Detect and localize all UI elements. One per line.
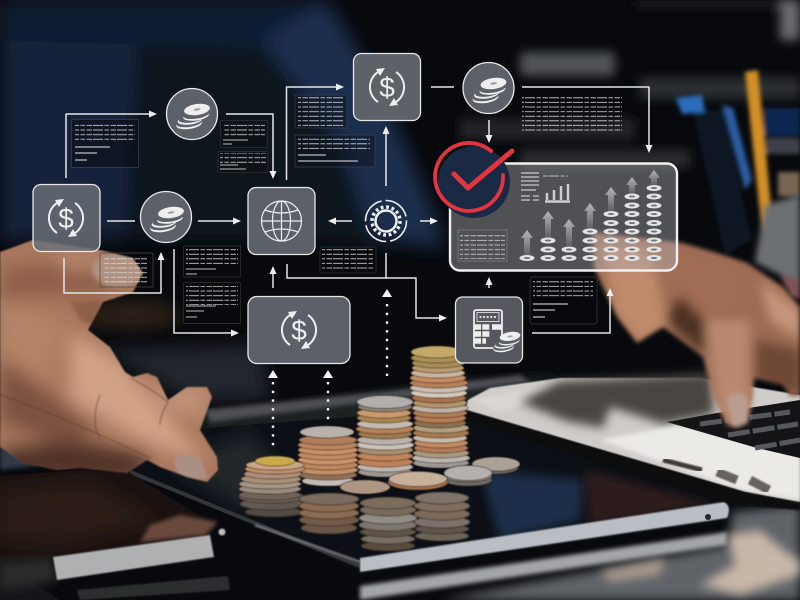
chart panel xyxy=(450,164,677,270)
dotted arrows xyxy=(268,289,392,446)
background: keyboard band behind coins xyxy=(200,375,560,440)
microtext block 9 xyxy=(320,247,376,273)
node: wide dollar box: $ xyxy=(291,315,307,346)
panel legend xyxy=(521,173,539,200)
tablet xyxy=(128,408,800,600)
calculator icon xyxy=(474,310,502,348)
node: globe box xyxy=(248,188,315,254)
flow arrows xyxy=(64,87,649,333)
laptop keyboard xyxy=(667,400,800,458)
tablet left edge xyxy=(130,472,360,566)
microtext block 6 on thumb xyxy=(100,253,153,287)
microtext block 1 xyxy=(72,120,138,168)
microtext block 2 xyxy=(220,120,268,148)
right hand xyxy=(585,225,800,435)
panel growth arrows xyxy=(521,170,660,256)
microtext block 3 xyxy=(218,152,268,172)
phone silver edge xyxy=(53,535,214,580)
microtext block 5 xyxy=(295,135,375,167)
node: gear xyxy=(366,200,406,242)
laptop xyxy=(465,373,800,510)
microtext block 11 xyxy=(530,277,597,324)
panel mini bar chart xyxy=(545,184,570,202)
red check badge xyxy=(435,143,512,218)
panel microtext xyxy=(458,230,507,261)
node: coin circle top right xyxy=(463,62,514,114)
coin stack 4 tallest xyxy=(410,346,470,468)
panel coin columns xyxy=(520,185,662,261)
coin reflections xyxy=(239,491,470,551)
hand reflection on table xyxy=(600,530,800,595)
tablet edge reflection xyxy=(360,532,727,600)
microtext block 7 xyxy=(184,246,240,277)
tablet silver edge xyxy=(360,502,729,572)
node: left dollar box: $ xyxy=(58,203,74,234)
node: coin circle middle xyxy=(140,192,192,242)
left hand xyxy=(0,235,225,485)
node: top dollar box xyxy=(354,54,420,120)
coin stack 3 xyxy=(356,396,414,477)
coin stack 1 gold top xyxy=(239,456,305,500)
phone bottom left xyxy=(0,470,230,600)
laptop underside shadow xyxy=(466,410,800,510)
node: left dollar box xyxy=(33,184,100,252)
coin stack 2 xyxy=(298,426,358,486)
laptop ports xyxy=(663,460,702,470)
background: warm desk glow and slate desk xyxy=(0,301,270,470)
table xyxy=(0,560,60,600)
microtext block 10 xyxy=(522,96,622,133)
node: calculator box xyxy=(456,297,522,363)
background: shelf blur xyxy=(460,0,800,168)
microtext block 4 xyxy=(295,95,347,128)
microtext block 8 xyxy=(184,282,240,324)
panel mini text xyxy=(543,173,568,180)
loose coins xyxy=(340,457,520,494)
node: wide dollar box xyxy=(248,296,350,364)
background: dark navy shirt xyxy=(0,0,445,250)
node: top dollar box: $ xyxy=(379,72,395,103)
background: pens on the right xyxy=(676,70,800,300)
node: coin circle upper xyxy=(166,88,218,140)
